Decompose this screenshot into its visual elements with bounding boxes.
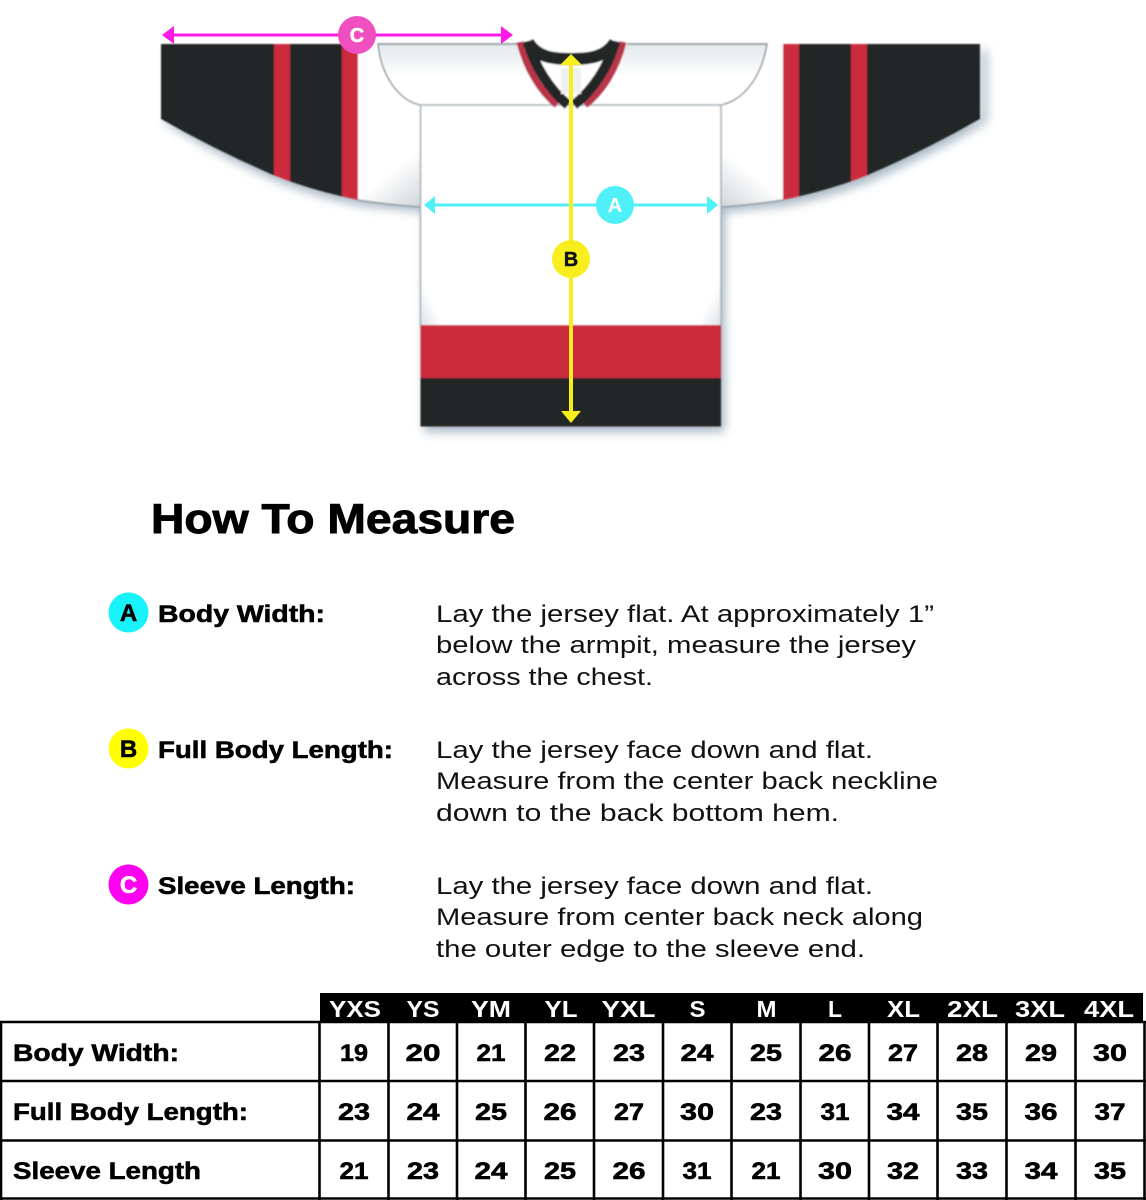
table header: sizes: YXS [329,996,381,1022]
row: body width: 25 [750,1040,782,1067]
description: sleeve length: the outer edge to the sleeve end. [436,936,865,963]
measure A: body width [108,592,934,691]
row: body width: 20 [406,1040,440,1067]
arrow C: sleeve length: C [350,25,364,47]
row: body width: 24 [680,1040,714,1067]
row: full body length: 27 [614,1099,644,1126]
table header: sizes: 2XL [947,996,998,1022]
row: full body length: 30 [680,1099,714,1126]
body side shading [422,265,720,325]
badge C: C [120,872,137,899]
arrow A: body width: A [608,195,622,217]
description: full body length: Lay the jersey face down and flat. [436,737,873,764]
table header: sizes: M [756,996,776,1022]
badge C [108,864,148,904]
collar black band [528,41,615,105]
yoke [378,44,767,105]
collar red trim [520,42,623,105]
description: full body length [436,737,938,827]
row: body width: 28 [956,1040,988,1067]
table header: sizes: S [690,996,706,1022]
row: full body length: 23 [338,1099,370,1126]
row: full body length: 31 [820,1099,850,1126]
jersey artwork [161,38,981,426]
row: body width [13,1040,1127,1067]
badge A [108,592,148,632]
table header: sizes: YS [406,996,440,1022]
row: full body length: Full Body Length: [13,1099,248,1126]
row: sleeve length: 33 [956,1158,988,1185]
row: full body length: 26 [544,1099,576,1126]
description: sleeve length: Measure from center back neck along [436,904,923,931]
row: body width: 19 [340,1040,368,1067]
row: full body length: 35 [956,1099,988,1126]
row: body width: Body Width: [13,1040,179,1067]
jersey drop shadow [161,50,987,432]
label: full body length: Full Body Length: [158,737,393,764]
table header: sizes: L [828,996,842,1022]
jersey illustration [161,16,987,432]
table header: sizes: 3XL [1015,996,1065,1022]
row: sleeve length: 35 [1094,1158,1126,1185]
row: body width: 27 [888,1040,918,1067]
left sleeve [161,44,421,209]
measure B: full body length [108,728,938,827]
badge B: B [120,736,137,763]
row: full body length: 24 [406,1099,440,1126]
label: sleeve length: Sleeve Length: [158,873,355,900]
description: body width: below the armpit, measure the jersey [436,632,916,659]
table header: sizes: 4XL [1084,996,1134,1022]
row: sleeve length [13,1158,1126,1185]
row: full body length: 34 [886,1099,920,1126]
row: full body length: 25 [475,1099,507,1126]
neck opening [520,38,622,105]
description: body width: Lay the jersey flat. At approximately 1” [436,601,934,628]
row: sleeve length: 30 [818,1158,852,1185]
table grid [0,1022,1146,1200]
row: sleeve length: 23 [407,1158,439,1185]
row: body width: 22 [544,1040,576,1067]
row: sleeve length: 34 [1024,1158,1058,1185]
row: full body length: 36 [1024,1099,1058,1126]
table header: sizes: YM [471,996,511,1022]
neck tag [561,68,581,94]
row: full body length: 23 [750,1099,782,1126]
row: sleeve length: 31 [682,1158,712,1185]
row: body width: 23 [613,1040,645,1067]
row: body width: 26 [818,1040,852,1067]
title: How To Measure [151,495,515,542]
badge A: A [120,600,137,627]
row: sleeve length: 21 [340,1158,368,1185]
description: body width [436,601,934,691]
description: full body length: Measure from the center back neckline [436,768,938,795]
arrow B: full body length: B [564,249,578,271]
black hem band [420,378,721,426]
row: body width: 30 [1093,1040,1127,1067]
table header: sizes: YXL [602,996,656,1022]
table header: sizes [320,993,1143,1022]
row: sleeve length: 24 [474,1158,508,1185]
row: sleeve length: 32 [887,1158,919,1185]
arrow C: sleeve length [162,16,513,54]
description: full body length: down to the back bottom hem. [436,800,839,827]
arrow B: full body length [552,54,590,423]
row: full body length [13,1099,1126,1126]
table header: sizes: XL [887,996,920,1022]
description: sleeve length: Lay the jersey face down and flat. [436,873,873,900]
badge B [108,728,148,768]
measure C: sleeve length [108,864,923,963]
row: body width: 21 [476,1040,506,1067]
row: sleeve length: 26 [612,1158,646,1185]
row: body width: 29 [1025,1040,1057,1067]
right sleeve [720,44,981,209]
arrow A: body width [424,186,718,224]
size table [0,993,1146,1200]
collar back arc [528,42,615,59]
description: body width: across the chest. [436,664,653,691]
description: sleeve length [436,873,923,963]
row: full body length: 37 [1094,1099,1126,1126]
row: sleeve length: 21 [752,1158,780,1185]
row: sleeve length: 25 [544,1158,576,1185]
red hem band [420,325,721,378]
jersey body [420,105,721,326]
label: body width: Body Width: [158,601,325,628]
underarm seams [358,200,783,207]
table header: sizes: YL [544,996,578,1022]
row: sleeve length: Sleeve Length [13,1158,201,1185]
